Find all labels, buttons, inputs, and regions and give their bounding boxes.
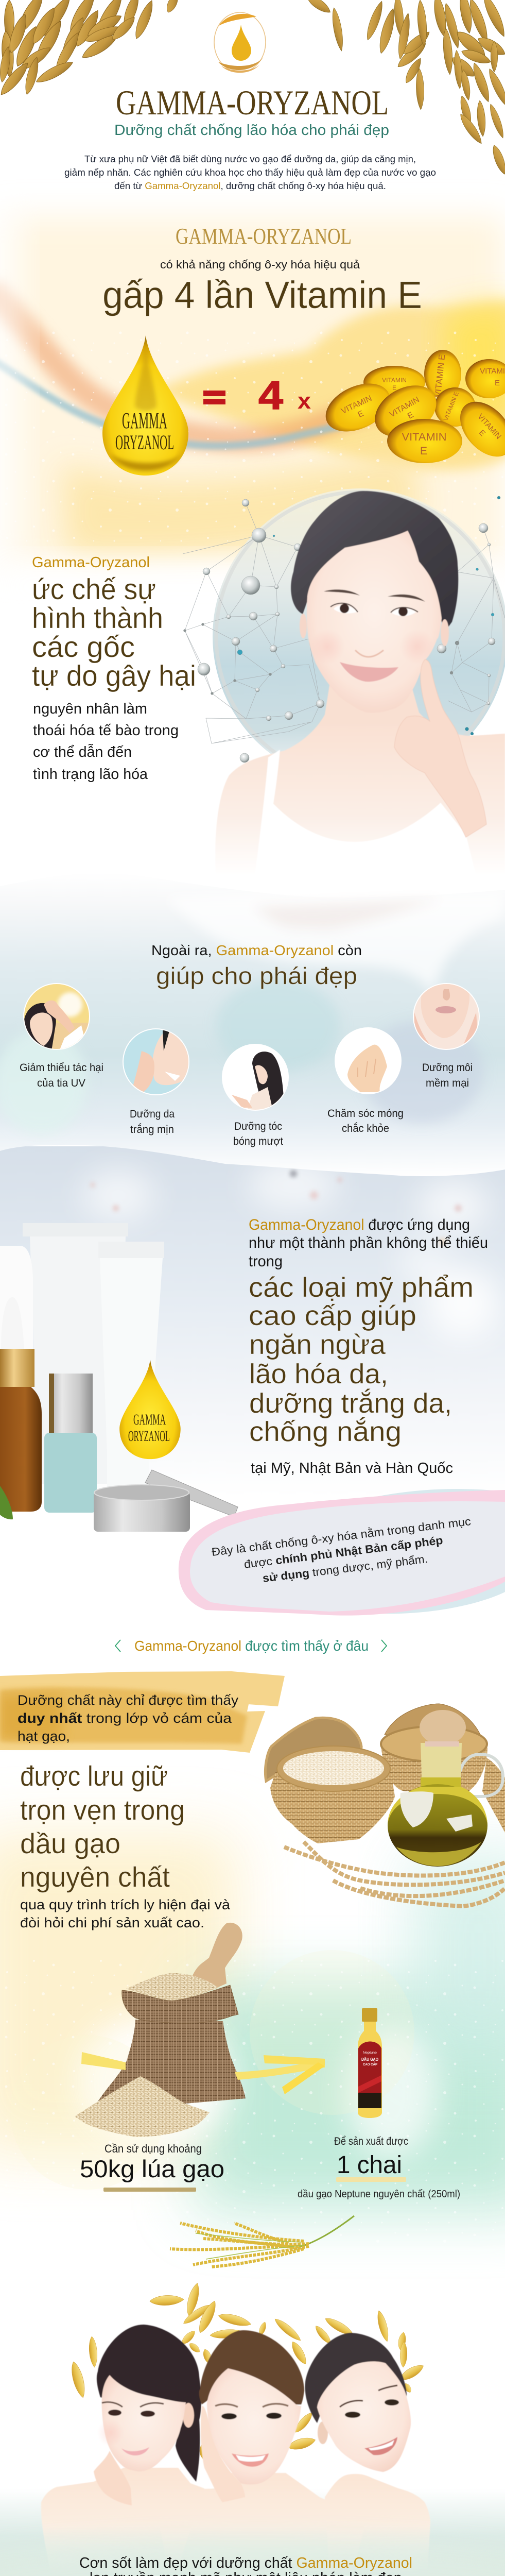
benefit: strong nails — [327, 1027, 404, 1134]
section heading: where it is found: Gamma-Oryzanol được tìm thấy ở đâu — [134, 1638, 369, 1654]
icon: vitamin E capsules: VITAMIN — [388, 395, 421, 419]
icon: gamma-oryzanol oil drop — [102, 335, 188, 476]
subtitle: Dưỡng chất chống lão hóa cho phái đẹp — [114, 122, 389, 139]
front basket with white rice — [270, 1746, 395, 1843]
rice quantity text: Cần sử dụng khoảng — [105, 2142, 202, 2155]
title: GAMMA-ORYZANOL — [116, 83, 389, 122]
benefit: skin whitening — [123, 1028, 189, 1136]
cosmetics product group — [0, 1223, 238, 1532]
callout: Japanese government approval: Đây là chất chống ô-xy hóa nằm trong danh mục — [211, 1515, 472, 1558]
heading: antioxidant comparison: GAMMA-ORYZANOL — [176, 224, 352, 249]
equation: equals four times: 4 — [258, 372, 283, 418]
pure rice oil text: trọn vẹn trong — [20, 1794, 185, 1826]
rice stalks — [284, 1842, 505, 1906]
cosmetics text block: chống nắng — [249, 1416, 402, 1447]
cosmetics text block: trong — [249, 1253, 283, 1270]
equation: equals four times: x — [298, 388, 311, 414]
rice at sack opening — [126, 1973, 219, 2004]
golden grains around women — [69, 2282, 426, 2461]
ears — [300, 614, 449, 646]
free radicals text block: thoái hóa tế bào trong — [33, 722, 179, 739]
oil quantity text: 1 chai — [337, 2151, 402, 2179]
panel: free radicals woman portrait — [183, 488, 505, 876]
molecule spheres — [183, 496, 500, 762]
pure rice oil text — [20, 1760, 231, 1930]
benefits heading: giúp cho phái đẹp — [156, 962, 357, 989]
pure rice oil text: được lưu giữ — [20, 1760, 168, 1792]
callout: Japanese government approval: sử dụng trong dược, mỹ phẩm. — [262, 1552, 428, 1585]
pure rice oil text: nguyên chất — [20, 1861, 170, 1893]
small oil drop with label — [119, 1360, 181, 1459]
brush stroke highlight — [0, 1671, 285, 1753]
cheeks — [310, 629, 434, 664]
oil quantity text — [298, 2136, 460, 2200]
pure rice oil text: đòi hỏi chi phí sản xuất cao. — [20, 1915, 204, 1930]
rice grains top left — [0, 0, 181, 98]
Neptune rice oil bottle — [358, 2008, 382, 2118]
benefit: UV protection: của tia UV — [37, 1077, 85, 1089]
free radicals text block: tình trạng lão hóa — [33, 766, 148, 783]
shoulders and neck — [215, 685, 505, 876]
hair — [291, 491, 458, 631]
rice panicle — [170, 2216, 354, 2267]
white tank top — [255, 750, 476, 876]
benefit: soft lips: Dưỡng môi — [422, 1062, 473, 1074]
rice baskets and oil jug — [265, 1704, 505, 1906]
benefit: shiny hair: bóng mượt — [233, 1136, 283, 1147]
green leaf — [0, 1486, 13, 1519]
rice quantity text: 50kg lúa gạo — [80, 2155, 224, 2182]
white tube large — [23, 1223, 128, 1484]
white tube small — [98, 1242, 164, 1489]
sack collar — [122, 1985, 238, 2023]
icon: vitamin E capsules — [318, 350, 505, 467]
oil quantity text: dầu gạo Neptune nguyên chất (250ml) — [298, 2189, 460, 2200]
icon: vitamin E capsules: E — [392, 384, 396, 392]
free radicals text block: Gamma-Oryzanol — [32, 554, 150, 571]
Neptune rice oil bottle: CAO CẤP — [363, 2061, 378, 2066]
brows and eyes — [324, 589, 425, 616]
heading: antioxidant comparison — [102, 224, 422, 316]
small oil drop with label: GAMMA — [133, 1411, 166, 1428]
free radicals text block: nguyên nhân làm — [33, 701, 147, 717]
free radicals text block: tự do gây hại — [32, 659, 196, 692]
icon: vitamin E capsules: VITAMIN E — [433, 354, 447, 398]
mist fade over shoulders — [0, 2540, 505, 2576]
free radicals text block: cơ thể dẫn đến — [33, 743, 132, 760]
icon: vitamin E capsules: E — [420, 445, 427, 457]
intro paragraph — [64, 154, 436, 191]
rice bran text: duy nhất trong lớp vỏ cám của — [18, 1710, 232, 1726]
lips — [340, 662, 398, 682]
icon: vitamin E capsules: VITAMIN E — [442, 391, 460, 422]
icon: vitamin E capsules: E — [357, 409, 365, 419]
free radicals text block: hình thành — [32, 602, 163, 635]
woman figure — [215, 491, 505, 876]
molecule network — [183, 503, 505, 743]
benefits heading — [151, 942, 362, 989]
benefits heading: Ngoài ra, Gamma-Oryzanol còn — [151, 942, 362, 958]
section background: soft cream and mint gradient — [0, 1834, 505, 2246]
pure rice oil text: qua quy trình trích ly hiện đại và — [20, 1897, 231, 1912]
icon: gamma-oryzanol oil drop: GAMMA — [122, 408, 167, 433]
heading: antioxidant comparison: gấp 4 lần Vitamin E — [102, 274, 422, 316]
benefit: UV protection: Giảm thiểu tác hại — [20, 1062, 103, 1074]
face — [307, 531, 442, 713]
small oil drop with label: ORYZANOL — [128, 1428, 170, 1445]
icon: vitamin E capsules: VITAMIN — [382, 377, 407, 384]
benefit: UV protection — [20, 983, 103, 1089]
benefit: skin whitening: trắng mịn — [130, 1124, 174, 1136]
right basket — [482, 1758, 505, 1833]
rice bran text — [18, 1692, 239, 1744]
pure rice oil text: dầu gạo — [20, 1827, 120, 1859]
free radicals text block — [32, 554, 196, 783]
woman center — [157, 2330, 364, 2576]
logo: wheat and oil drop in ring — [214, 12, 266, 73]
amber dropper bottle — [0, 1297, 42, 1512]
benefit: strong nails: chắc khỏe — [342, 1123, 389, 1134]
basket lid — [265, 1718, 361, 1781]
three women portraits — [0, 2325, 505, 2576]
free radicals text block: ức chế sự — [32, 573, 156, 606]
rice sack — [75, 1923, 246, 2137]
section background: golden wave — [0, 206, 505, 613]
intro paragraph: Từ xưa phụ nữ Việt đã biết dùng nước vo gạo để dưỡng da, giúp da căng mịn, — [84, 154, 416, 164]
benefit: shiny hair — [222, 1044, 289, 1147]
icon: vitamin E capsules: VITAMIN — [402, 431, 447, 443]
cosmetics text block: như một thành phần không thể thiếu — [249, 1234, 488, 1251]
section background: cosmetics blossom — [0, 1146, 505, 1497]
rice bran text: hạt gạo, — [18, 1728, 70, 1744]
icon: vitamin E capsules: E — [406, 411, 415, 421]
cosmetics text block: lão hóa da, — [249, 1359, 388, 1389]
heading: antioxidant comparison: có khả năng chống ô-xy hóa hiệu quả — [160, 258, 360, 271]
arrow: from rice to oil — [81, 2052, 325, 2094]
cosmetics text block: cao cấp giúp — [249, 1300, 416, 1331]
woman right — [305, 2333, 430, 2576]
cosmetics text block: các loại mỹ phẩm — [249, 1272, 474, 1303]
nose — [355, 650, 384, 657]
oil jug — [388, 1710, 503, 1867]
section background: beauty benefits — [0, 873, 505, 1176]
benefit: shiny hair: Dưỡng tóc — [234, 1121, 282, 1132]
icon: gamma-oryzanol oil drop: ORYZANOL — [115, 431, 174, 454]
cosmetics text block: dưỡng trắng da, — [249, 1388, 452, 1419]
icon: vitamin E capsules: VITAMIN — [340, 394, 373, 416]
cosmetics text block — [249, 1216, 488, 1477]
equation: equals four times — [203, 372, 311, 418]
brown rice pile — [75, 2076, 210, 2137]
benefit: soft lips — [413, 981, 480, 1089]
Neptune rice oil bottle: DẦU GẠO — [361, 2057, 378, 2062]
cosmetics text block: ngăn ngừa — [249, 1329, 386, 1360]
icon: vitamin E capsules: VITAMIN — [476, 412, 503, 441]
intro paragraph: giảm nếp nhăn. Các nghiên cứu khoa học cho thấy hiệu quả làm đẹp của nước vo gạo — [64, 167, 436, 178]
benefit: strong nails: Chăm sóc móng — [327, 1108, 404, 1120]
icon: vitamin E capsules: E — [495, 379, 500, 387]
cosmetics text block: tại Mỹ, Nhật Bản và Hàn Quốc — [251, 1460, 453, 1477]
white bottle left — [0, 1246, 33, 1484]
benefit: soft lips: mềm mại — [426, 1077, 469, 1089]
molecular bubble — [213, 488, 505, 784]
aluminum tin — [94, 1470, 238, 1532]
cosmetics text block: Gamma-Oryzanol được ứng dụng — [249, 1216, 470, 1233]
scoop — [192, 1923, 242, 1989]
intro paragraph: đến từ Gamma-Oryzanol , dưỡng chất chống ô-xy hóa hiệu quả. — [114, 181, 386, 191]
rice grains top right — [304, 0, 505, 176]
rear basket — [381, 1704, 487, 1791]
woman left — [41, 2325, 204, 2576]
teal cream bottle — [44, 1374, 97, 1513]
oil quantity text: Để sản xuất được — [334, 2136, 408, 2147]
benefit: skin whitening: Dưỡng da — [130, 1108, 175, 1120]
rice quantity text — [80, 2142, 224, 2192]
sack body — [97, 2020, 246, 2104]
free radicals text block: các gốc — [32, 631, 135, 664]
Neptune rice oil bottle: Neptune — [363, 2052, 377, 2055]
final section background with grass field — [0, 2488, 505, 2576]
callout: Japanese government approval — [179, 1489, 505, 1616]
callout: Japanese government approval: được chính phủ Nhật Bản cấp phép — [243, 1534, 444, 1571]
closing text: Cơn sốt làm đẹp với dưỡng chất Gamma-Oryzanol — [79, 2555, 412, 2571]
rice bran text: Dưỡng chất này chỉ được tìm thấy — [18, 1692, 239, 1708]
flowing fabric highlights — [0, 891, 505, 1133]
hand and finger — [394, 659, 486, 837]
icon: vitamin E capsules: E — [477, 428, 487, 438]
